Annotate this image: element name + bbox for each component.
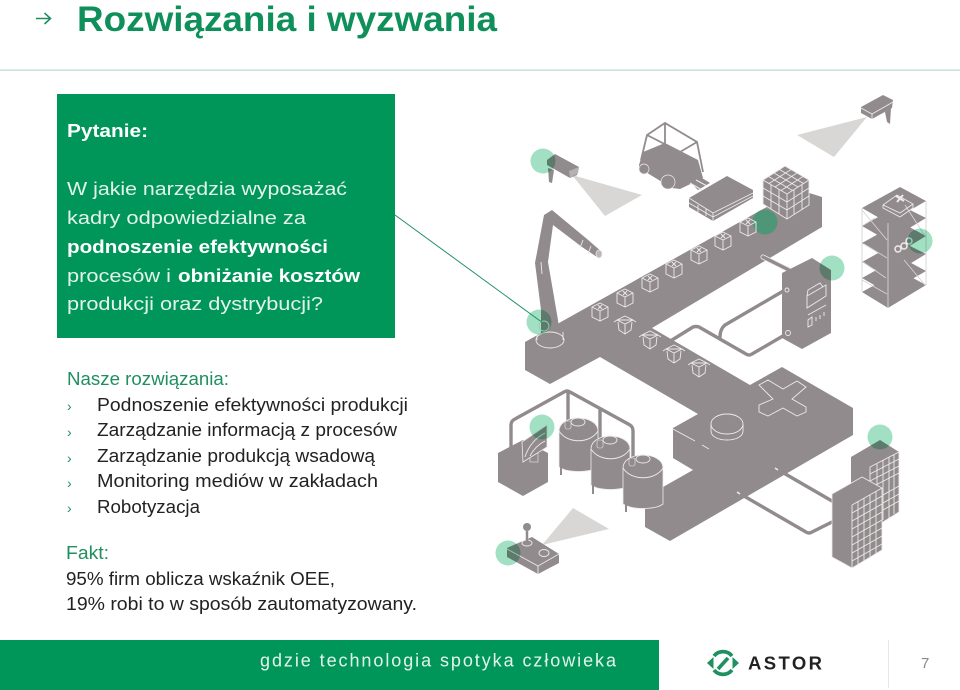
camera right bbox=[797, 95, 893, 157]
camera left bbox=[547, 154, 642, 216]
panel: question: W jakie narzędzia wyposażać bbox=[67, 178, 347, 199]
panel: question: kadry odpowiedzialne za bbox=[67, 207, 307, 228]
conveyor and main floor bbox=[525, 190, 853, 541]
panel: question: obniżanie kosztów bbox=[178, 265, 361, 286]
solutions list: › bbox=[67, 398, 72, 414]
belt highlight circle bbox=[752, 210, 778, 234]
solutions list: Monitoring mediów w zakładach bbox=[97, 471, 378, 491]
solutions list: Robotyzacja bbox=[97, 497, 201, 517]
solutions list bbox=[67, 369, 408, 517]
control block with monitor bbox=[498, 425, 548, 496]
solutions list: › bbox=[67, 500, 72, 516]
logo: Astor: ASTOR bbox=[748, 652, 822, 674]
header arrow icon bbox=[36, 13, 50, 24]
page number: 7 bbox=[921, 655, 929, 672]
solutions list: Nasze rozwiązania: bbox=[67, 369, 229, 389]
panel: question: procesów i bbox=[67, 265, 171, 286]
title: Rozwiązania i wyzwania bbox=[77, 0, 498, 39]
floor disc bbox=[673, 414, 743, 449]
cabinet pipes bbox=[672, 257, 789, 355]
logo: Astor bbox=[707, 652, 822, 674]
footer separator bbox=[888, 640, 889, 688]
panel: question: Pytanie: bbox=[67, 120, 148, 141]
fact text bbox=[66, 543, 417, 614]
fact text: 95% firm oblicza wskaźnik OEE, bbox=[66, 569, 335, 589]
floor X marking bbox=[759, 380, 806, 416]
shelf rack bbox=[862, 187, 926, 308]
mixing tanks bbox=[559, 418, 663, 512]
joystick device bbox=[507, 508, 609, 574]
panel: question bbox=[57, 94, 395, 338]
solutions list: Zarządzanie informacją z procesów bbox=[97, 420, 398, 440]
forklift cart bbox=[639, 123, 753, 221]
fact text: 19% robi to w sposób zautomatyzowany. bbox=[66, 594, 417, 614]
building pipes bbox=[737, 468, 832, 533]
fact text: Fakt: bbox=[66, 543, 109, 563]
tank pipes bbox=[511, 391, 633, 460]
panel: question: podnoszenie efektywności bbox=[67, 236, 328, 257]
connector line bbox=[395, 215, 543, 323]
solutions list: › bbox=[67, 475, 72, 491]
solutions list: Zarządzanie produkcją wsadową bbox=[97, 446, 376, 466]
control cabinet bbox=[782, 258, 831, 349]
stacked cubes bbox=[763, 166, 809, 219]
footer bar bbox=[0, 640, 659, 690]
panel: question: produkcji oraz dystrybucji? bbox=[67, 293, 323, 314]
illustration: factory bbox=[498, 95, 926, 574]
boxes on belt bbox=[592, 218, 756, 377]
highlight circles bbox=[496, 148, 932, 566]
footer tagline: gdzie technologia spotyka człowieka bbox=[260, 650, 617, 670]
solutions list: › bbox=[67, 424, 72, 440]
buildings bbox=[832, 440, 899, 568]
solutions list: › bbox=[67, 450, 72, 466]
solutions list: Podnoszenie efektywności produkcji bbox=[97, 395, 408, 415]
robot arm bbox=[535, 210, 602, 348]
header divider bbox=[0, 70, 960, 71]
